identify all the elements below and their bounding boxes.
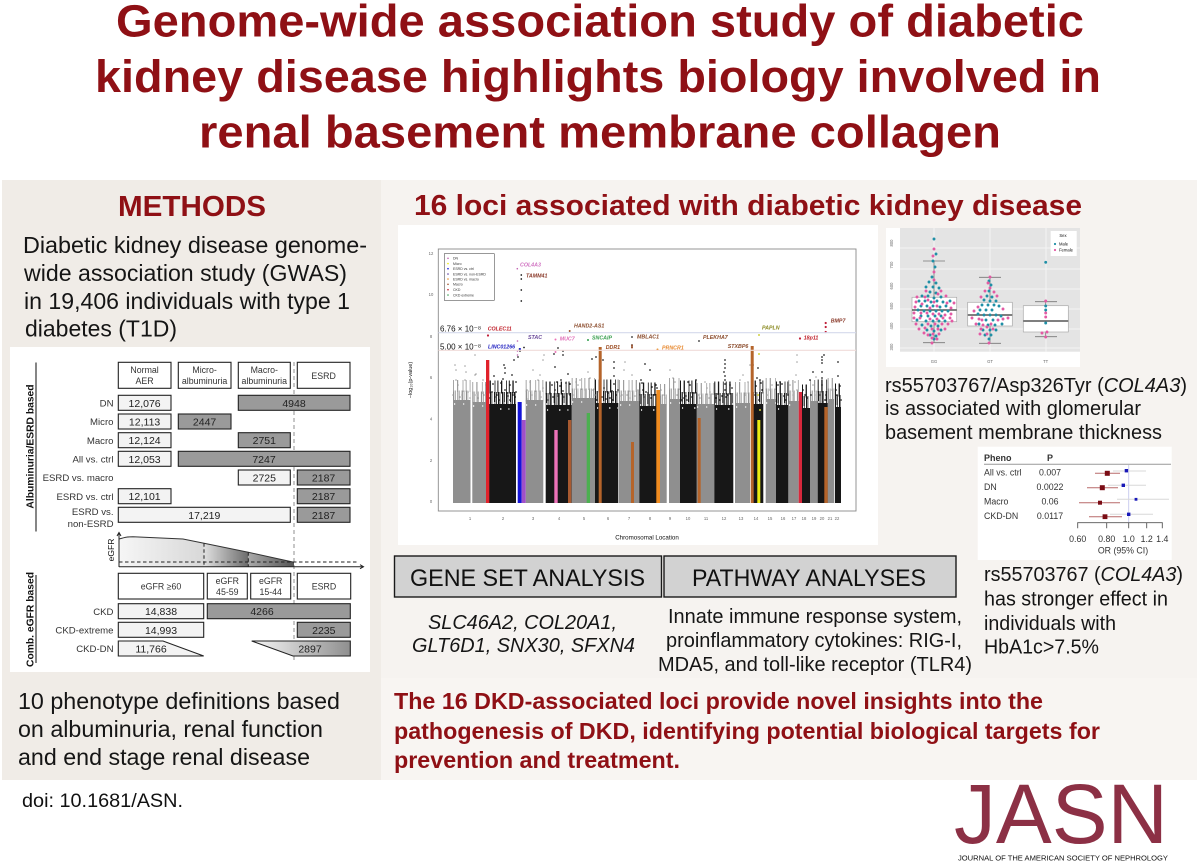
phenotype caption: on albuminuria, renal function <box>18 716 323 742</box>
genotype labels: GT <box>987 359 993 364</box>
phenotype caption: 10 phenotype definitions based <box>18 688 340 714</box>
side label: albuminuria: Albuminuria/ESRD based <box>26 384 36 509</box>
plot area <box>900 228 1080 352</box>
x axis chromosome labels: 16 <box>781 516 786 521</box>
plot legend: ESRD vs. ctrl <box>453 267 474 271</box>
x axis chromosome labels: 1 <box>469 516 472 521</box>
panel: results background <box>381 180 1197 780</box>
table header: Pheno <box>984 453 1012 463</box>
plot legend: DN <box>453 257 459 261</box>
eGFR column headers: eGFR <box>216 576 239 586</box>
plot legend: ESRD vs. macro <box>453 277 479 281</box>
conclusion: pathogenesis of DKD, identifying potential biological targets for <box>394 718 1100 744</box>
albuminuria rows: All vs. ctrl <box>72 454 114 466</box>
eGFR decline curve: eGFR <box>106 539 116 561</box>
gene labels: PRNCR1 <box>662 346 684 352</box>
eGFR rows: 14,838 <box>145 606 177 618</box>
eGFR rows: 2235 <box>312 625 336 637</box>
x axis chromosome labels: Chromosomal Location <box>615 534 679 542</box>
albuminuria column headers: albuminuria <box>182 376 227 386</box>
sex legend: Sex <box>1059 233 1068 238</box>
gene labels: DDR1 <box>606 345 620 351</box>
albuminuria column headers <box>118 362 350 388</box>
albuminuria rows: 2725 <box>253 472 276 484</box>
albuminuria rows <box>43 395 350 530</box>
table rows: 0.0117 <box>1037 511 1063 521</box>
gene labels: LINC01266 <box>488 344 515 350</box>
eGFR column headers: eGFR <box>259 576 282 586</box>
x axis chromosome labels: 2 <box>502 516 505 521</box>
conclusion: prevention and treatment. <box>394 747 680 773</box>
JASN logo: JASN <box>954 767 1168 861</box>
x axis chromosome labels: 21 <box>828 516 833 521</box>
x axis chromosome labels: 18 <box>802 516 807 521</box>
x axis chromosome labels: 11 <box>704 516 709 521</box>
albuminuria rows: 12,076 <box>129 398 161 410</box>
y axis: 2 <box>430 458 433 463</box>
plot legend <box>444 254 494 300</box>
odds ratio axis <box>1069 523 1169 556</box>
plot legend: ESRD vs. non-ESRD <box>453 272 486 276</box>
pathway analyses box <box>664 556 956 597</box>
manhattan plot <box>398 225 878 545</box>
albuminuria column headers: albuminuria <box>242 376 287 386</box>
albuminuria rows: Micro <box>90 417 114 428</box>
x axis chromosome labels: 12 <box>722 516 727 521</box>
x axis chromosome labels: 3 <box>532 516 535 521</box>
phenotype caption <box>18 688 340 770</box>
gene labels: STXBP6 <box>728 344 748 350</box>
y axis labels: 400 <box>889 322 894 330</box>
table rows: CKD-DN <box>984 511 1018 521</box>
conclusion: The 16 DKD-associated loci provide novel insights into the <box>394 688 1043 714</box>
x axis chromosome labels: 20 <box>820 516 825 521</box>
albuminuria rows: 12,053 <box>129 454 161 466</box>
pathway description: Innate immune response system, <box>668 605 962 628</box>
x axis chromosome labels: 6 <box>607 516 610 521</box>
methods description: Diabetic kidney disease genome- <box>23 232 367 258</box>
methods description <box>23 232 367 342</box>
panel: methods <box>2 180 381 780</box>
eGFR rows: 4266 <box>250 606 274 618</box>
eGFR column headers: 45-59 <box>216 587 239 597</box>
gene labels: 18p11 <box>804 336 818 342</box>
eGFR rows: CKD-extreme <box>55 626 114 636</box>
y axis labels: 800 <box>889 239 894 246</box>
odds ratio axis: OR (95% CI) <box>1098 546 1148 556</box>
genotype labels: GG <box>931 359 937 364</box>
y axis labels: 700 <box>889 261 894 268</box>
plot legend: CKD <box>453 288 461 292</box>
eGFR column headers: eGFR ≥60 <box>141 582 181 592</box>
y axis: 8 <box>430 334 433 339</box>
gene labels: SNCAIP <box>592 336 612 342</box>
sex legend: Male <box>1059 242 1069 246</box>
y axis: 12 <box>429 251 434 256</box>
methods heading: METHODS <box>118 191 266 223</box>
table header <box>984 453 1171 464</box>
jagged peaks: grey chromosomes <box>453 384 834 400</box>
albuminuria column headers: Normal <box>130 365 159 375</box>
pathway description <box>658 605 972 676</box>
forest plot caption: rs55703767 (COL4A3) <box>984 563 1183 586</box>
side label: eGFR: Comb. eGFR based <box>26 572 36 667</box>
methods description: wide association study (GWAS) <box>23 260 347 286</box>
albuminuria rows: 12,113 <box>129 416 160 428</box>
boxplot caption: is associated with glomerular <box>885 397 1141 420</box>
y axis labels: 300 <box>889 343 894 350</box>
threshold lines: 6.76 × 10⁻⁸ <box>440 324 481 334</box>
x axis chromosome labels: 15 <box>768 516 773 521</box>
boxes <box>912 261 1068 343</box>
gene labels: HAND2-AS1 <box>574 324 604 330</box>
title: kidney disease highlights biology involved in <box>95 51 1101 102</box>
pathway analyses box: PATHWAY ANALYSES <box>692 565 926 592</box>
swarm: female <box>914 249 1047 343</box>
grey points <box>453 355 832 400</box>
chromosome columns <box>453 398 841 503</box>
y axis: −log₁₀(p-value) <box>408 362 414 398</box>
title: renal basement membrane collagen <box>199 106 1001 158</box>
eGFR column headers: ESRD <box>312 582 336 592</box>
sex legend <box>1051 231 1077 256</box>
albuminuria rows: DN <box>100 398 114 410</box>
highlighted loci columns <box>486 346 828 503</box>
effect estimates <box>1079 465 1169 523</box>
y axis: 10 <box>429 292 434 297</box>
x axis chromosome labels: 10 <box>686 516 691 521</box>
black points <box>490 275 841 400</box>
boxplot caption <box>885 374 1187 444</box>
y axis <box>408 251 434 504</box>
y axis: 6 <box>430 375 433 380</box>
odds ratio axis: 0.60 <box>1069 534 1086 544</box>
albuminuria rows: 2751 <box>253 435 276 447</box>
eGFR column headers: 15-44 <box>259 587 282 597</box>
odds ratio axis: 0.80 <box>1098 534 1115 544</box>
boxplot caption: basement membrane thickness <box>885 421 1162 444</box>
genotype labels <box>931 359 1049 364</box>
y axis labels <box>889 239 894 350</box>
odds ratio axis: 1.2 <box>1141 534 1153 544</box>
albuminuria rows: 12,124 <box>129 435 161 447</box>
gene labels: PAPLN <box>762 326 780 332</box>
x axis chromosome labels: 9 <box>669 516 672 521</box>
gene set list <box>412 611 635 657</box>
JASN logo: JOURNAL OF THE AMERICAN SOCIETY OF NEPHROLOGY <box>958 854 1168 862</box>
threshold lines <box>438 324 856 352</box>
albuminuria rows: 12,101 <box>129 491 161 503</box>
y axis labels: 500 <box>889 302 894 310</box>
albuminuria rows: 7247 <box>252 454 276 466</box>
x axis chromosome labels: 8 <box>649 516 652 521</box>
x axis chromosome labels: 19 <box>812 516 817 521</box>
x axis chromosome labels <box>469 516 840 542</box>
x axis chromosome labels: 13 <box>739 516 744 521</box>
plot legend: Micro <box>453 262 462 266</box>
gene labels: TAMM41 <box>526 274 547 280</box>
gene set list: SLC46A2, COL20A1, <box>428 611 617 634</box>
gene labels: PLEKHA7 <box>703 335 729 341</box>
albuminuria column headers: ESRD <box>311 371 336 381</box>
table rows: All vs. ctrl <box>984 468 1022 478</box>
gene labels: MUC7 <box>560 336 576 342</box>
plot legend: Macro <box>453 283 463 287</box>
albuminuria rows: 17,219 <box>188 510 221 522</box>
coloured lead points <box>488 269 826 410</box>
gene labels <box>488 262 846 352</box>
x axis chromosome labels: 14 <box>754 516 759 521</box>
y axis: 0 <box>430 499 433 504</box>
eGFR rows: 14,993 <box>145 625 177 637</box>
gene labels: BMP7 <box>831 318 846 324</box>
threshold lines: 5.00 × 10⁻⁸ <box>440 342 481 352</box>
table header: P <box>1047 453 1053 463</box>
x axis chromosome labels: 4 <box>558 516 561 521</box>
gene set analysis box <box>394 556 662 597</box>
boxplot caption: rs55703767/Asp326Tyr (COL4A3) <box>885 374 1187 397</box>
forest plot caption: individuals with <box>984 612 1116 635</box>
eGFR rows: CKD <box>93 607 114 618</box>
albuminuria rows: ESRD vs. macro <box>43 473 114 484</box>
table rows: 0.0022 <box>1037 482 1064 492</box>
x axis chromosome labels: 7 <box>628 516 631 521</box>
forest plot caption: has stronger effect in <box>984 588 1168 610</box>
methods description: in 19,406 individuals with type 1 <box>24 288 350 314</box>
albuminuria rows: 2187 <box>312 472 335 484</box>
dashed ESRD boundary <box>293 362 295 660</box>
albuminuria rows: 4948 <box>282 398 306 410</box>
swarm: male <box>917 239 1046 339</box>
albuminuria rows: Macro <box>87 436 114 447</box>
albuminuria column headers: Macro- <box>251 365 278 375</box>
pathway description: MDA5, and toll-like receptor (TLR4) <box>658 653 972 676</box>
y axis: 4 <box>430 416 433 422</box>
gene set analysis box: GENE SET ANALYSIS <box>410 565 645 592</box>
forest plot caption <box>984 563 1183 658</box>
title <box>95 0 1101 158</box>
albuminuria rows: ESRD vs. <box>72 507 114 518</box>
gene labels: COLEC11 <box>488 326 512 332</box>
albuminuria rows: 2187 <box>312 491 335 503</box>
odds ratio axis: 1.4 <box>1156 534 1169 544</box>
eGFR column headers <box>118 573 351 599</box>
albuminuria column headers: AER <box>136 376 154 386</box>
gene labels: MBLAC1 <box>637 334 659 340</box>
table rows <box>984 468 1064 521</box>
table rows: 0.06 <box>1041 496 1059 506</box>
glomerular basement membrane boxplot <box>886 228 1080 367</box>
y axis labels: 600 <box>889 282 894 290</box>
eGFR rows <box>55 604 350 656</box>
x axis chromosome labels: 22 <box>835 516 840 521</box>
gene labels: COL4A3 <box>520 262 541 268</box>
jagged peaks: black chromosomes <box>454 386 841 410</box>
albuminuria rows: 2447 <box>193 416 216 428</box>
odds ratio axis: 1.0 <box>1123 534 1135 544</box>
forest plot caption: HbA1c>7.5% <box>984 636 1099 658</box>
phenotype definition diagram <box>10 347 370 672</box>
gene labels: STAC <box>528 335 542 341</box>
eGFR rows: CKD-DN <box>76 644 114 655</box>
table rows: DN <box>984 482 997 492</box>
albuminuria rows: non-ESRD <box>68 519 114 530</box>
plot legend: CKD extreme <box>453 293 474 297</box>
table rows: Macro <box>984 496 1009 506</box>
sex legend: Female <box>1059 248 1074 252</box>
plot frame <box>438 249 856 511</box>
albuminuria column headers: Micro- <box>192 365 217 375</box>
eGFR rows: 11,766 <box>135 644 167 656</box>
forest plot <box>978 447 1172 560</box>
albuminuria rows: 2187 <box>312 510 335 522</box>
conclusion <box>381 678 1197 780</box>
results heading: 16 loci associated with diabetic kidney disease <box>414 190 1082 222</box>
pathway description: proinflammatory cytokines: RIG-I, <box>666 629 962 652</box>
methods description: diabetes (T1D) <box>25 316 177 342</box>
table rows: 0.007 <box>1039 468 1061 478</box>
phenotype caption: and end stage renal disease <box>18 744 310 770</box>
eGFR decline curve <box>106 532 364 569</box>
x axis chromosome labels: 5 <box>583 516 586 521</box>
albuminuria rows: ESRD vs. ctrl <box>56 492 114 503</box>
gene set list: GLT6D1, SNX30, SFXN4 <box>412 634 635 657</box>
x axis chromosome labels: 17 <box>792 516 797 521</box>
genotype labels: TT <box>1043 359 1049 364</box>
eGFR rows: 2897 <box>298 644 322 656</box>
doi: doi: 10.1681/ASN. <box>22 790 183 812</box>
